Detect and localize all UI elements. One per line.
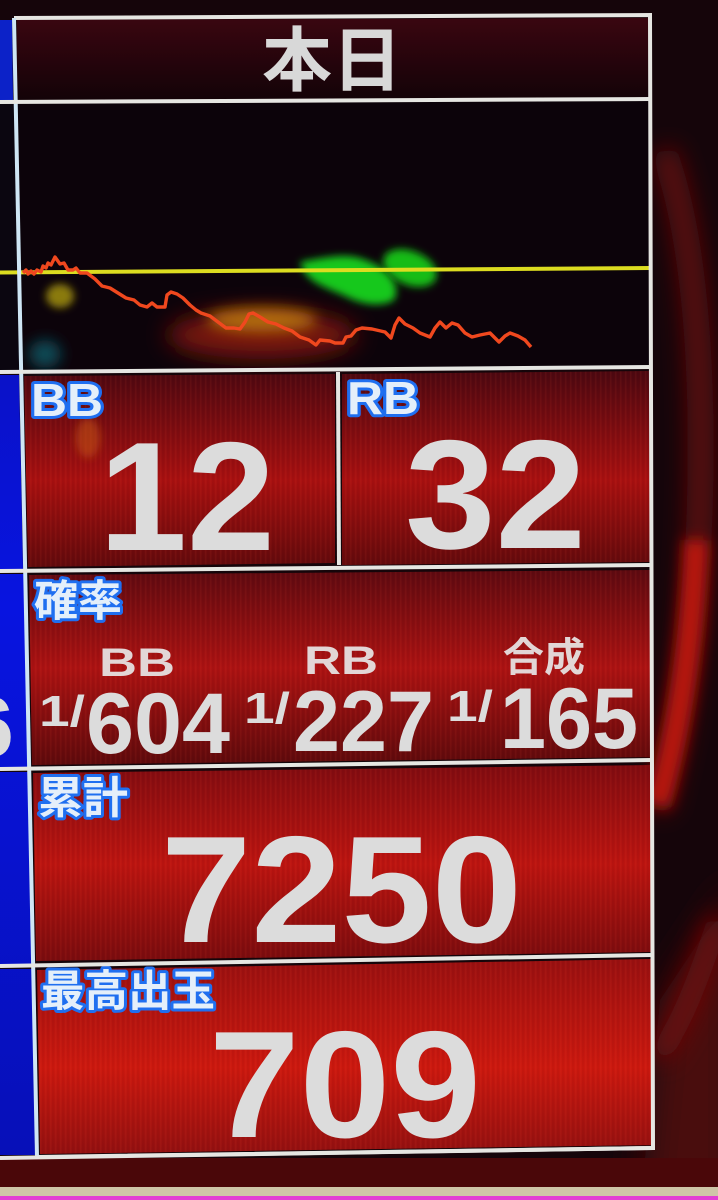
label: RB <box>347 372 419 424</box>
header panel: 本日 <box>17 18 648 100</box>
BB probability: BB <box>99 641 175 685</box>
RB probability <box>244 639 434 770</box>
label: BB <box>31 374 103 426</box>
value: 7250 <box>161 805 522 975</box>
panel: cumulative total <box>33 765 652 975</box>
value: 709 <box>209 1000 481 1170</box>
panel: probability <box>29 570 651 772</box>
combined probability: 165 <box>500 671 638 767</box>
value: 32 <box>405 408 586 581</box>
decorative red arc at right <box>657 150 718 1056</box>
panel: RB count <box>342 371 650 581</box>
panel: highest payout <box>37 959 653 1170</box>
label: 累計 <box>38 774 128 823</box>
RB probability: 1/ <box>244 684 290 733</box>
value: 12 <box>99 410 275 583</box>
title: 本日 <box>262 22 402 100</box>
label: 確率 <box>34 578 122 626</box>
bottom bezel strip <box>0 1187 718 1200</box>
BB probability: 604 <box>86 676 230 772</box>
BB probability <box>39 641 230 772</box>
left blue column <box>0 20 35 1155</box>
panel: BB count <box>24 374 335 583</box>
chart panel <box>0 101 651 370</box>
RB probability: 227 <box>293 674 434 770</box>
result line <box>23 257 531 347</box>
combined probability: 合成 <box>503 636 585 680</box>
combined probability <box>447 636 638 767</box>
reference line <box>0 268 650 272</box>
label: 最高出玉 <box>41 968 215 1016</box>
screen reflections <box>29 242 442 368</box>
combined probability: 1/ <box>447 682 493 731</box>
BB probability: 1/ <box>39 687 85 736</box>
RB probability: RB <box>304 639 378 683</box>
